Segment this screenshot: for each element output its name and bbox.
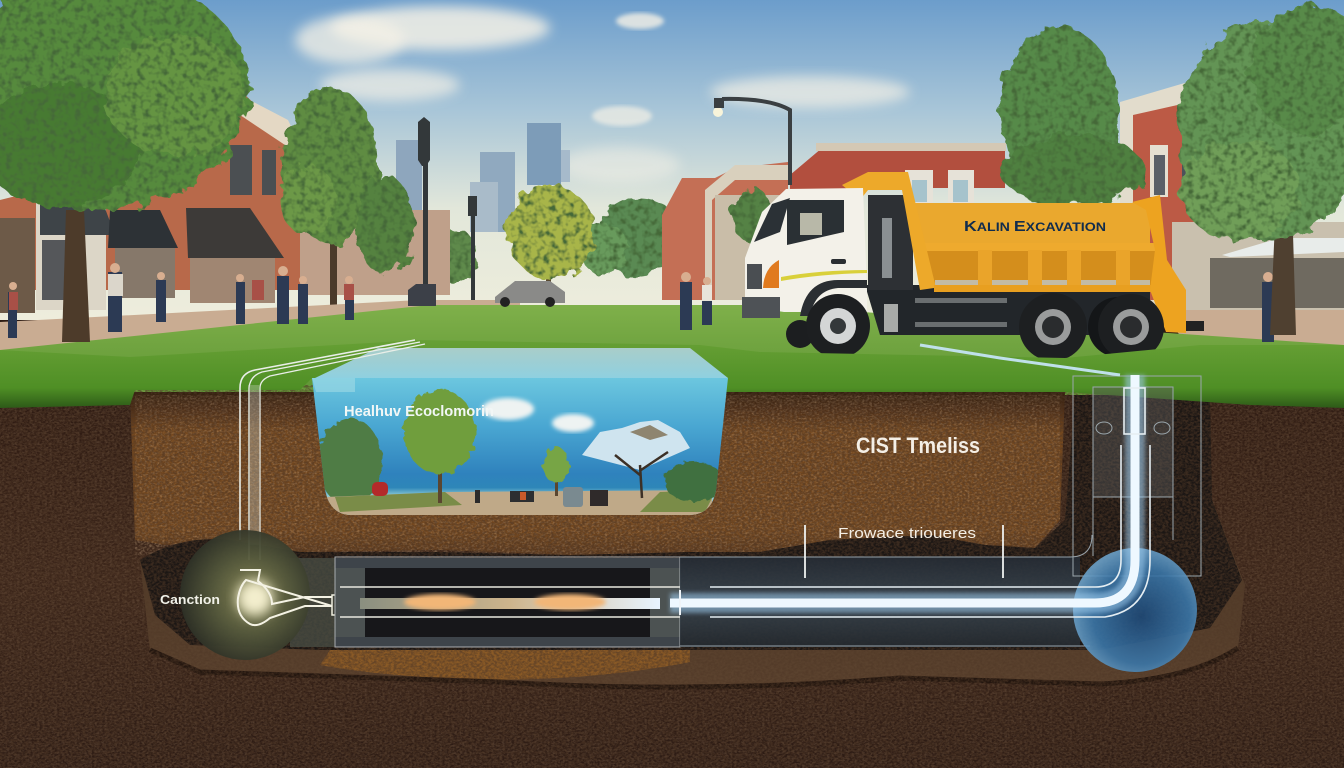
- shaft enclosure: [1073, 376, 1201, 576]
- surface pipe: right: [920, 345, 1120, 375]
- left storefront buildings: [0, 95, 450, 313]
- street lamp: right: [713, 98, 790, 185]
- soil grain texture: [0, 385, 1344, 768]
- tree: yellow-green: [507, 186, 595, 290]
- deep soil background: [0, 395, 1344, 768]
- right brick building: [1120, 72, 1344, 312]
- measure ticks: [805, 525, 1003, 578]
- truck wheels: [806, 293, 1164, 361]
- tree: behind truck: [732, 27, 1144, 243]
- mid-right brick buildings: [662, 143, 1006, 300]
- clouds: [295, 6, 910, 183]
- truck name: KALIN EXCAVATION: [964, 218, 1106, 235]
- heated lining core: [360, 598, 660, 609]
- receiving chamber: [1073, 548, 1197, 672]
- clouds in pool: [482, 398, 594, 432]
- street trees: [280, 27, 1144, 318]
- street lamp: left: [418, 117, 477, 329]
- chamber label: Canction: [160, 592, 220, 607]
- pool tree: large: [404, 390, 476, 503]
- bulb fitting: [238, 570, 332, 625]
- dump truck: [742, 172, 1204, 361]
- connection chamber: [180, 530, 357, 660]
- park lawn: [0, 305, 1344, 400]
- rear steer tyre: [786, 320, 814, 348]
- visitors and benches: [372, 482, 608, 507]
- crowd of pedestrians: [8, 263, 1274, 342]
- snowy rocks: [582, 420, 690, 470]
- distant skyline: [396, 123, 570, 232]
- sky: [0, 0, 1344, 320]
- ecosystem label: Healhuv Ecoclomorin: [344, 403, 494, 420]
- grey fade between chamber and housing: [290, 558, 340, 647]
- right bush: [664, 462, 724, 502]
- grass strip: [0, 340, 1344, 408]
- big tree: left: [0, 0, 250, 342]
- translucent conduit: [680, 525, 1092, 647]
- pool: healthy ecosystem cutaway: [312, 348, 728, 516]
- pool ground: [325, 490, 712, 516]
- water surface: [315, 348, 728, 378]
- pavement: [0, 300, 1344, 352]
- upper soil block: [130, 392, 1065, 555]
- glass front: [312, 378, 728, 515]
- faint deep soil mottling: [0, 385, 1344, 768]
- parked cars: [408, 281, 565, 307]
- soil label: process: Frowace trioueres: [838, 526, 976, 542]
- left glass edge: [312, 378, 355, 392]
- access pipe: left: [240, 340, 425, 560]
- pool tree: small: [543, 447, 569, 496]
- bare tree: [615, 452, 668, 498]
- lined pipe housing: [335, 557, 680, 647]
- truck dump body: [842, 172, 1204, 333]
- clipped scene: [318, 390, 724, 516]
- left bush: [318, 418, 382, 506]
- soil label: CIST: CIST Tmeliss: [856, 433, 980, 458]
- truck cab: [742, 188, 867, 318]
- big tree: right: [1178, 5, 1344, 335]
- tree: mid-left: [280, 87, 413, 318]
- truck chassis: [865, 285, 1150, 335]
- glowing pipe: [670, 375, 1150, 617]
- background trees: [435, 198, 682, 283]
- excavated cavity: [140, 395, 1245, 687]
- upper soil mottling: [135, 395, 1060, 555]
